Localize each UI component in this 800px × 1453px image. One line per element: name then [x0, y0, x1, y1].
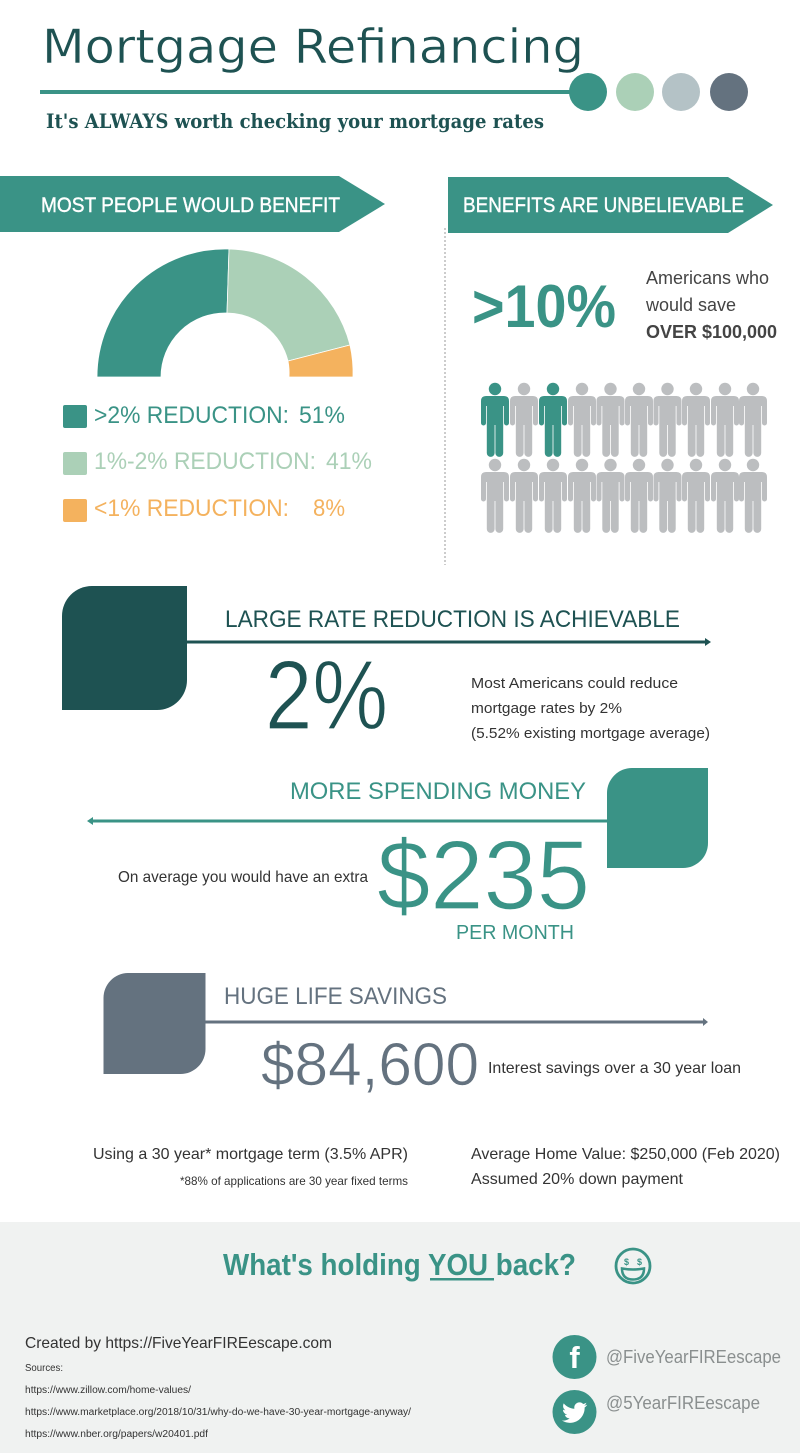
sources: Sources: — [25, 1363, 63, 1374]
description: (5.52% existing mortgage average) — [471, 725, 710, 742]
title: Mortgage Refinancing — [42, 20, 584, 75]
assumptions: term — [93, 1146, 408, 1188]
heading: MORE SPENDING MONEY — [290, 778, 586, 805]
sources: https://www.marketplace.org/2018/10/31/why-do-we-have-30-year-mortgage-anyway/ — [25, 1407, 411, 1418]
stat description: Americans who — [646, 268, 769, 288]
legend: 1%-2%: 1%-2% REDUCTION: — [94, 448, 316, 475]
subtitle: It's ALWAYS worth checking your mortgage rates — [46, 109, 544, 133]
description: Most Americans could reduce — [471, 675, 678, 692]
description: On average you would have an extra — [118, 869, 368, 886]
call to action: What's holding YOU back? — [223, 1247, 576, 1282]
section: large rate reduction — [62, 586, 711, 750]
description: Interest savings over a 30 year loan — [488, 1060, 741, 1077]
social: facebook — [552, 1335, 781, 1379]
assumptions: term: Using a 30 year* mortgage term (3.5% APR) — [93, 1146, 408, 1163]
description — [471, 675, 710, 742]
assumptions: term: *88% of applications are 30 year fixed terms — [180, 1174, 408, 1188]
panel: benefits are unbelievable — [448, 177, 777, 533]
heading: LARGE RATE REDUCTION IS ACHIEVABLE — [225, 606, 680, 633]
tile: teal — [607, 768, 708, 868]
social: facebook: f — [569, 1340, 580, 1375]
social: twitter — [552, 1390, 760, 1434]
header rule — [40, 90, 575, 94]
stat description: would save — [645, 295, 736, 315]
header dots — [569, 73, 748, 111]
legend: over 2%: >2% REDUCTION: — [94, 402, 289, 429]
big number: 2%: 2% — [265, 640, 388, 750]
semi-donut chart — [97, 249, 353, 377]
icon: money smiley: $ — [637, 1257, 642, 1267]
legend: 1%-2%: 41% — [326, 448, 372, 475]
legend: over 2%: 51% — [299, 402, 345, 429]
big number: $84,600: $84,600 — [261, 1031, 479, 1098]
banner: benefits are unbelievable: BENEFITS ARE UNBELIEVABLE — [463, 194, 744, 217]
big number: $235: $235 — [377, 820, 590, 930]
sources: https://www.nber.org/papers/w20401.pdf — [25, 1429, 208, 1440]
arrow: right — [205, 1018, 708, 1026]
sources — [25, 1363, 411, 1440]
per month: PER MONTH — [456, 922, 574, 944]
legend: under 1%: <1% REDUCTION: — [94, 495, 289, 522]
social: facebook: @FiveYearFIREescape — [606, 1347, 781, 1367]
assumptions: home value: Assumed 20% down payment — [471, 1171, 684, 1188]
description: mortgage rates by 2% — [471, 700, 622, 717]
banner: most people would benefit: MOST PEOPLE WOULD BENEFIT — [41, 194, 340, 217]
panel: most people would benefit — [0, 176, 385, 522]
header — [40, 20, 748, 133]
stat description — [645, 268, 777, 342]
assumptions: home value — [471, 1146, 780, 1188]
footer panel — [0, 1222, 800, 1453]
stat: over 10%: >10% — [472, 273, 616, 340]
tile: slate — [104, 973, 206, 1074]
legend: under 1%: 8% — [313, 495, 345, 522]
heading: HUGE LIFE SAVINGS — [224, 983, 447, 1010]
social: twitter: @5YearFIREescape — [606, 1393, 760, 1413]
section: huge life savings — [104, 973, 741, 1098]
arrow: left — [87, 817, 607, 825]
section: more spending money — [87, 768, 708, 944]
legend — [63, 402, 372, 522]
sources: https://www.zillow.com/home-values/ — [25, 1385, 191, 1396]
pictogram: people — [481, 383, 767, 533]
stat description: OVER $100,000 — [646, 322, 777, 342]
tile: dark teal — [62, 586, 187, 710]
arrow: right — [187, 638, 711, 646]
banner: most people would benefit — [0, 176, 385, 232]
icon: money smiley: $ — [624, 1257, 629, 1267]
icon: money smiley — [616, 1249, 650, 1283]
assumptions: home value: Average Home Value: $250,000 (Feb 2020) — [471, 1146, 780, 1163]
banner: benefits are unbelievable — [448, 177, 773, 233]
credits: Created by https://FiveYearFIREescape.com — [25, 1335, 332, 1352]
